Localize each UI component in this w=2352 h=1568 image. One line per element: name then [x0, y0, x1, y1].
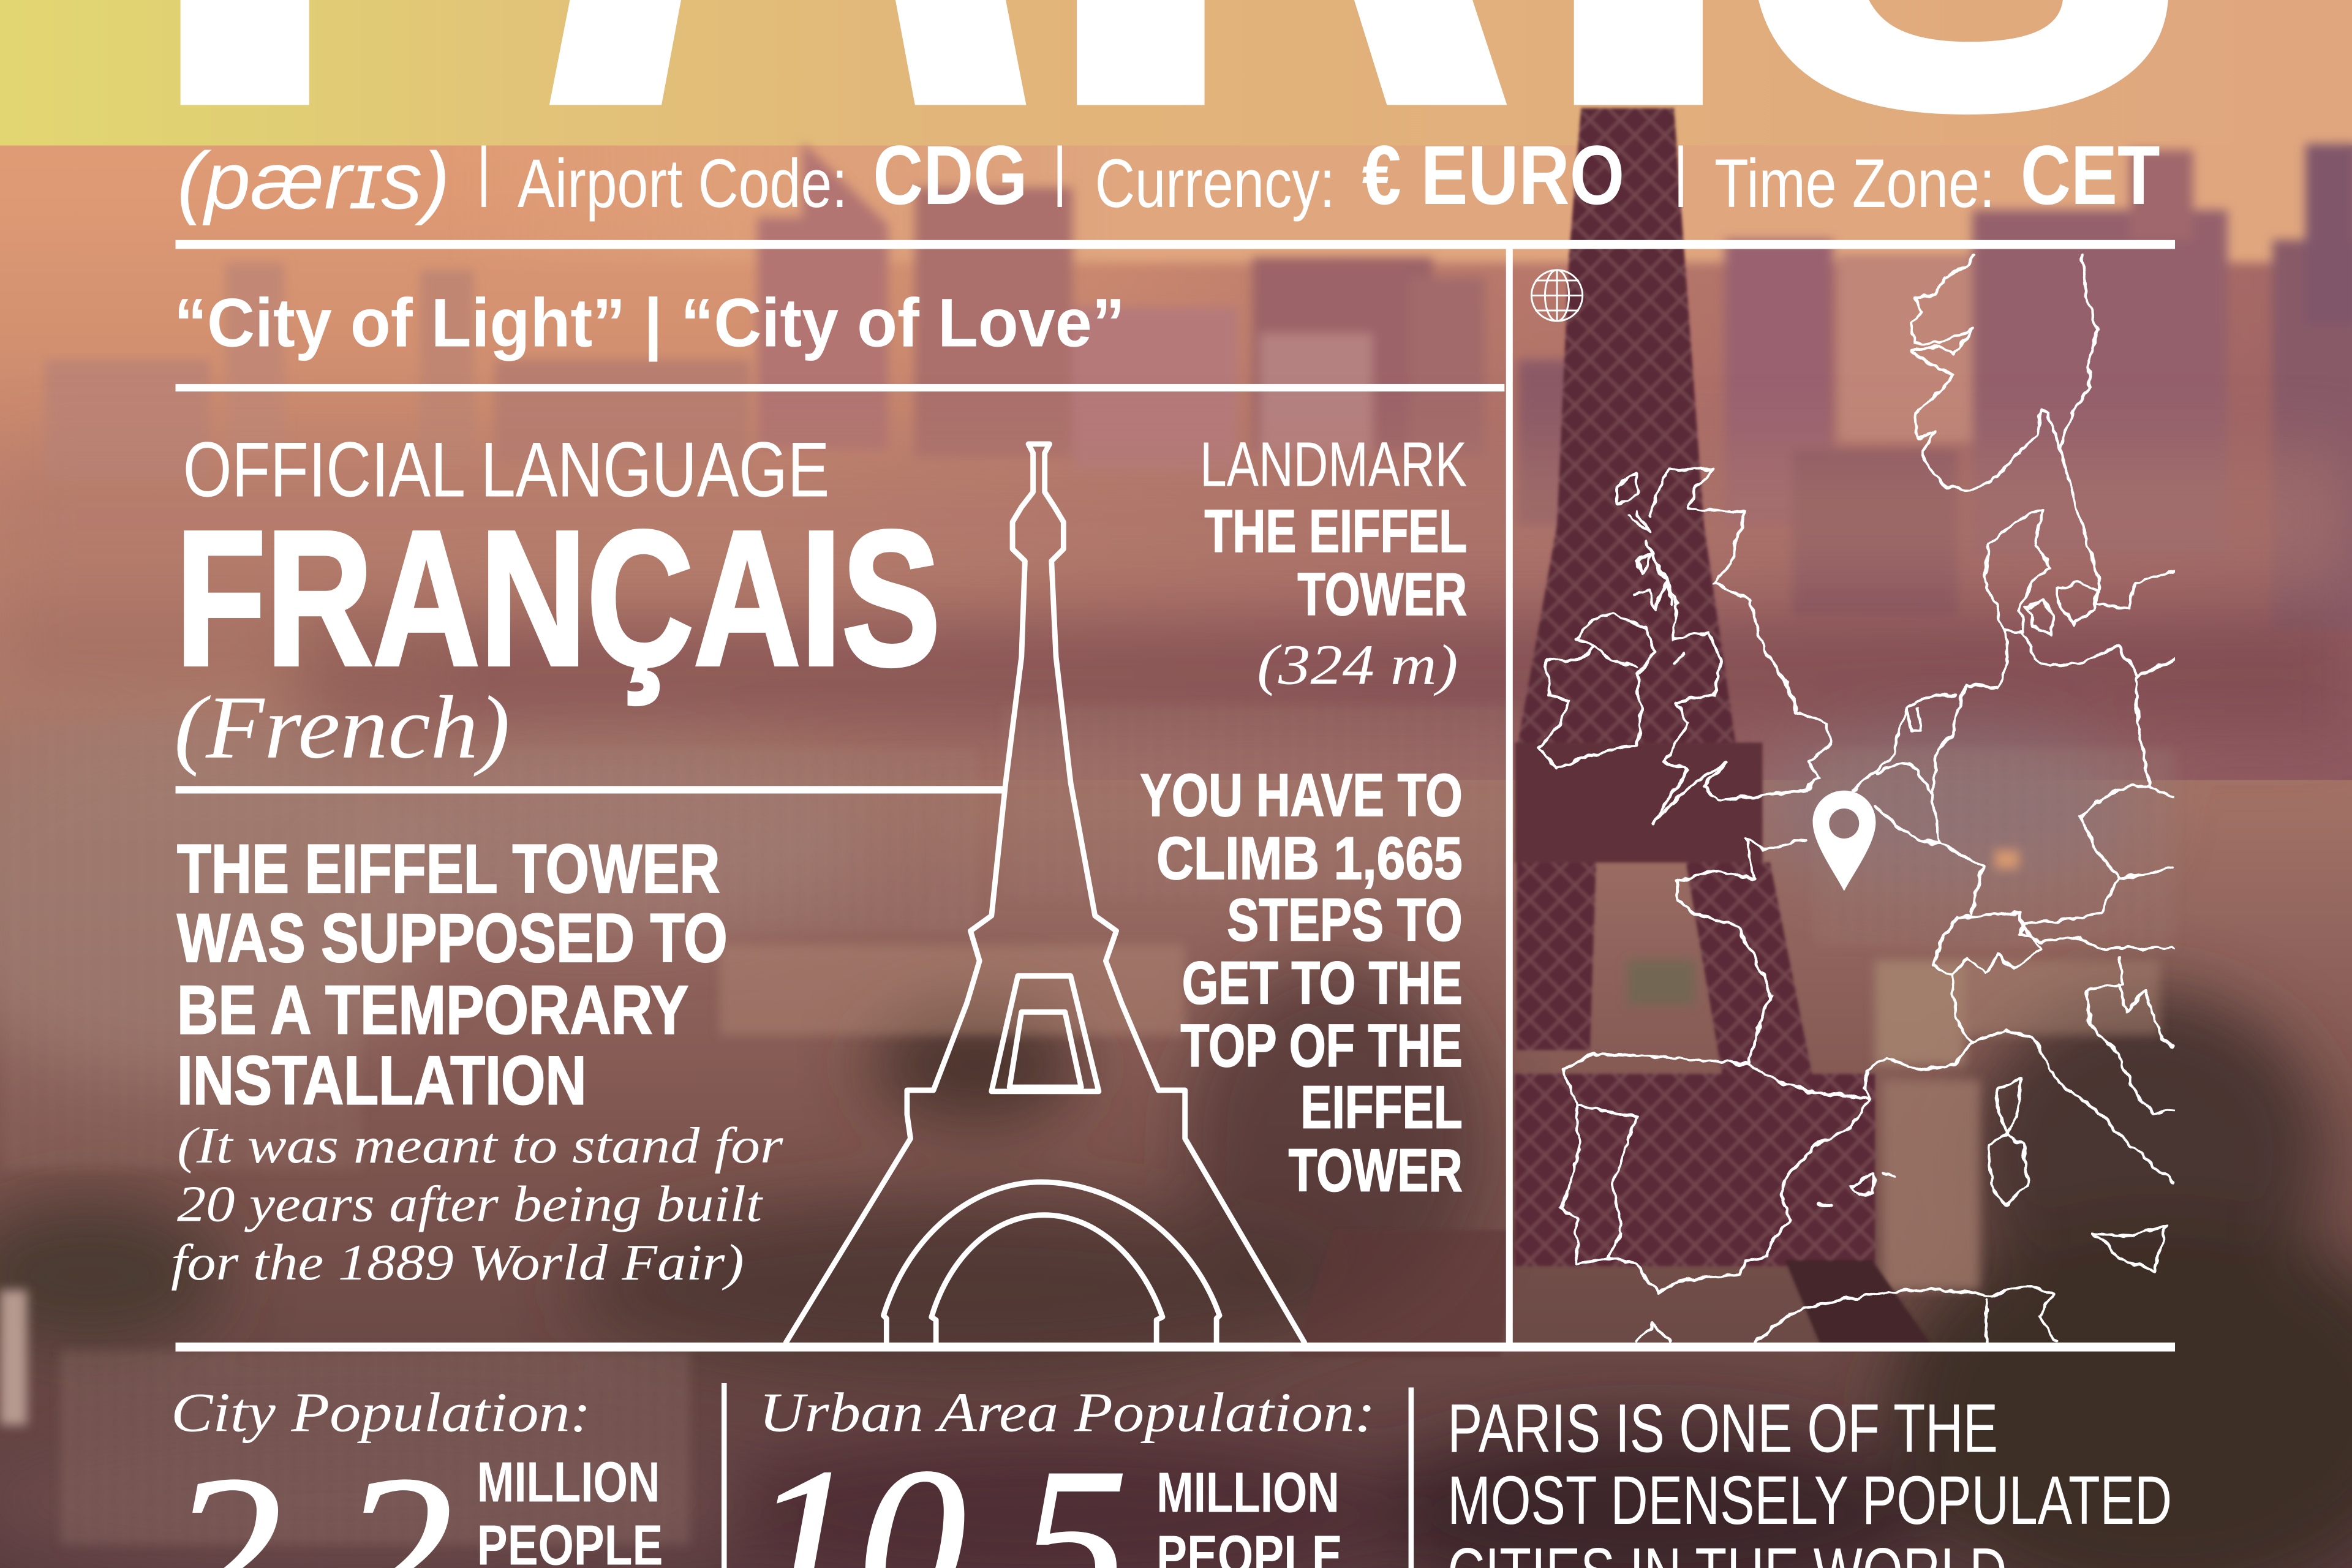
fact note: (It was meant to stand for [177, 1118, 783, 1174]
fact: density: PARIS IS ONE OF THE [1447, 1390, 1998, 1467]
separators [481, 146, 1683, 207]
fact: temporary installation: INSTALLATION [177, 1041, 587, 1118]
landmark name: THE EIFFEL [1205, 497, 1467, 565]
map of western Europe [1539, 255, 2174, 1345]
icon: globe [1531, 270, 1583, 321]
fact: steps: TOWER [1289, 1136, 1463, 1204]
airport code value: CDG [873, 129, 1028, 222]
stat: urban area population: Urban Area Population: [759, 1381, 1376, 1443]
pronunciation: (pærɪs) [177, 135, 450, 226]
stat: urban area population: MILLION [1156, 1461, 1340, 1525]
landmark name [1205, 497, 1467, 628]
landmark name: TOWER [1297, 560, 1467, 628]
nicknames: “City of Light” | “City of Love” [174, 284, 1125, 363]
fact: steps: YOU HAVE TO [1140, 761, 1463, 829]
stat: city population [168, 1381, 663, 1568]
official language label: OFFICIAL LANGUAGE [183, 426, 829, 513]
currency value: € EURO [1362, 129, 1624, 222]
fact: temporary installation: THE EIFFEL TOWER [177, 830, 720, 907]
fact: temporary installation: BE A TEMPORARY [177, 971, 688, 1048]
icon: Eiffel tower outline [786, 444, 1305, 1343]
fact: steps: GET TO THE [1182, 949, 1463, 1016]
fact note [171, 1118, 783, 1291]
fact: temporary installation: WAS SUPPOSED TO [177, 899, 728, 976]
fact: steps: CLIMB 1,665 [1156, 824, 1463, 892]
currency label: Currency: [1095, 145, 1335, 222]
grid rules [176, 240, 2175, 1568]
time zone label: Time Zone: [1714, 145, 1995, 222]
landmark label: LANDMARK [1200, 429, 1467, 499]
fact: steps: STEPS TO [1227, 886, 1463, 954]
language translation: (French) [174, 677, 510, 777]
fact: steps: EIFFEL [1300, 1074, 1463, 1141]
fact: temporary installation [177, 830, 728, 1118]
landmark height: (324 m) [1257, 634, 1458, 697]
fact: steps: TOP OF THE [1180, 1012, 1463, 1079]
title: PARIS [135, 0, 2188, 364]
stat: city population: MILLION [477, 1450, 660, 1513]
fact: steps [1140, 761, 1463, 1204]
background Eiffel tower [1290, 108, 1935, 1357]
fact note: 20 years after being built [177, 1176, 763, 1232]
icon: location pin on Paris [1813, 791, 1875, 891]
stat: city population: City Population: [171, 1381, 591, 1443]
fact note: for the 1889 World Fair) [171, 1235, 744, 1291]
fact: density [1447, 1390, 2172, 1568]
time zone value: CET [2021, 129, 2160, 222]
stat: urban area population [750, 1381, 1376, 1568]
airport code label: Airport Code: [518, 145, 848, 222]
language name: FRANÇAIS [176, 491, 941, 706]
